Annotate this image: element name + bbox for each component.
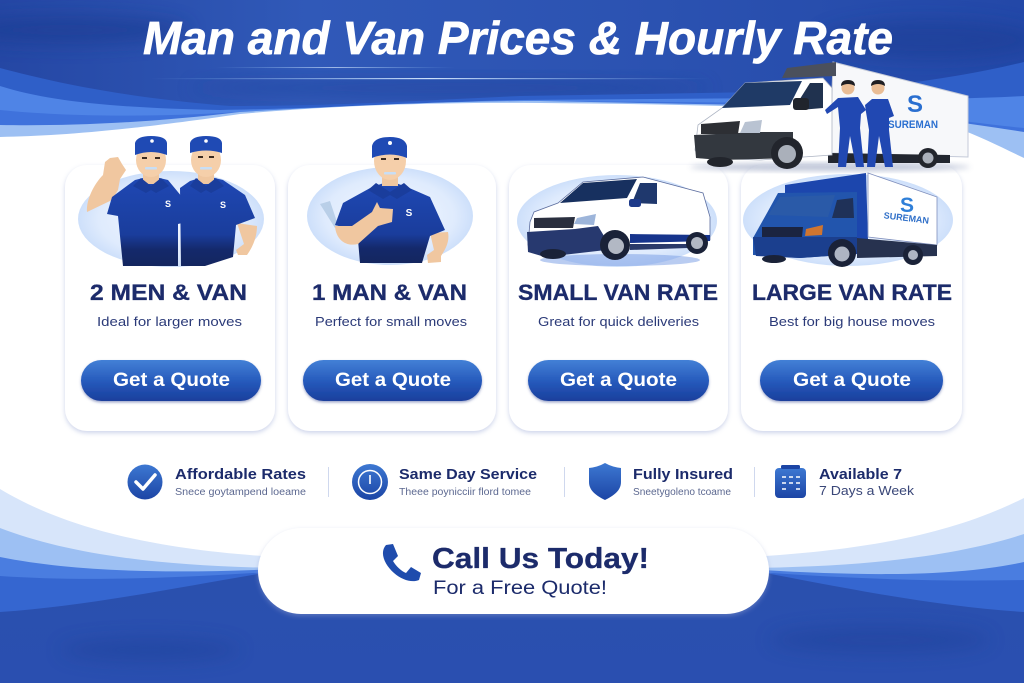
panel: 1 man and van (288, 137, 496, 431)
icon: phone (383, 544, 421, 581)
feature: available 7 days (775, 465, 915, 498)
man on the right: S (220, 200, 226, 210)
title: Man and Van Prices & Hourly Rate (143, 12, 893, 64)
button (303, 360, 482, 401)
card (741, 165, 962, 431)
top blue header band (0, 0, 1024, 165)
feature: available 7 days: 7 Days a Week (819, 483, 915, 498)
truck logo: SUREMAN (888, 119, 938, 131)
button (81, 360, 261, 401)
feature: available 7 days: Available 7 (819, 466, 902, 483)
bottom blue waves (0, 489, 300, 683)
van logo: S (900, 194, 914, 217)
button (528, 360, 709, 401)
icon: check badge (128, 464, 162, 500)
heading: LARGE VAN RATE (752, 280, 952, 305)
description: Perfect for small moves (315, 314, 468, 329)
heading: 1 MAN & VAN (312, 280, 467, 305)
title underline (150, 67, 710, 79)
feature: same day service: Theee poynicciir flord tomee (399, 487, 531, 498)
call to action (258, 528, 769, 614)
icon: clock (352, 464, 388, 500)
button: Get a Quote (113, 370, 230, 391)
button: Get a Quote (335, 370, 451, 391)
man right (865, 80, 894, 167)
van logo: SUREMAN (883, 210, 930, 226)
call heading: Call Us Today! (432, 543, 649, 575)
icon: two men in uniform (78, 136, 264, 267)
heading: 2 MEN & VAN (90, 280, 247, 305)
description: Great for quick deliveries (538, 314, 700, 329)
panel: small van rate (509, 165, 728, 431)
feature: affordable rates: Snece goytampend loeame (175, 487, 306, 498)
button (760, 360, 943, 401)
feature: same day service: Same Day Service (399, 466, 537, 483)
heading: SMALL VAN RATE (518, 280, 718, 305)
panel: large van rate (741, 165, 962, 431)
feature: fully insured: Fully Insured (633, 466, 733, 483)
van logo (883, 194, 930, 226)
truck logo: S (907, 91, 923, 118)
icon: moving truck with two men (690, 62, 970, 171)
feature: same day service (352, 464, 537, 500)
man on the left (87, 136, 195, 266)
feature: fully insured (589, 463, 733, 500)
button: Get a Quote (793, 370, 911, 391)
icon: calendar (775, 465, 806, 498)
feature: affordable rates: Affordable Rates (175, 466, 306, 483)
icon: small white van (517, 175, 717, 267)
icon: shield (589, 463, 621, 500)
description: Best for big house moves (769, 314, 936, 329)
man on the right (180, 136, 257, 266)
pill (258, 528, 769, 614)
button: Get a Quote (560, 370, 677, 391)
card (65, 165, 275, 431)
feature: fully insured: Sneetygoleno tcoame (633, 487, 731, 498)
feature: affordable rates (128, 464, 306, 500)
card (288, 165, 496, 431)
icon: man giving thumbs up: S (406, 208, 413, 219)
card (509, 165, 728, 431)
man left (825, 80, 866, 167)
man on the left: S (165, 199, 171, 209)
icon: large blue box van (743, 173, 953, 267)
panel: 2 men and van (65, 136, 275, 431)
call subheading: For a Free Quote! (433, 578, 607, 599)
description: Ideal for larger moves (97, 314, 243, 329)
truck logo (888, 91, 938, 131)
icon: man giving thumbs up (307, 137, 473, 265)
